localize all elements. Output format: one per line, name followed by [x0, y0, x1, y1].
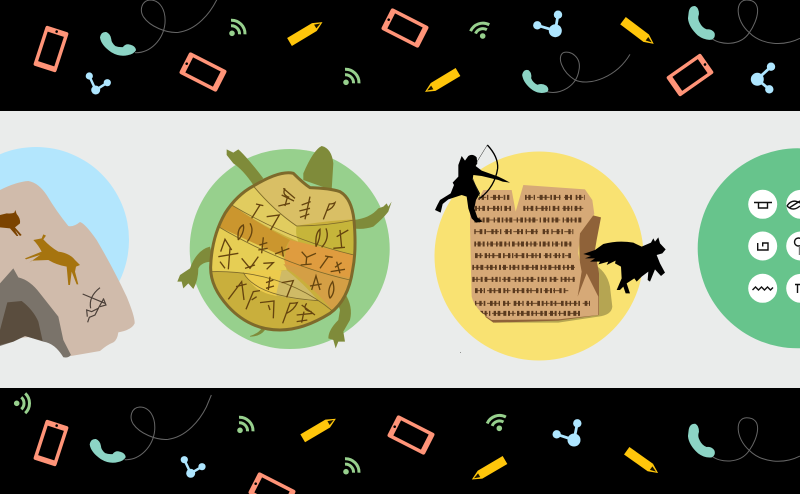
panel: cave paintings — [0, 147, 135, 358]
blue background circle — [0, 147, 129, 333]
tablet dark edge — [485, 215, 601, 323]
bottom black band — [0, 388, 800, 494]
icon: mobile phone — [33, 419, 69, 467]
symbol badge: cross — [786, 274, 800, 303]
shell divider lines — [212, 186, 354, 312]
icon: pencil — [300, 415, 338, 442]
panel: pictographic symbols — [698, 148, 800, 348]
cuneiform inscription rows — [472, 197, 590, 313]
icon: share network — [86, 72, 111, 94]
shell outline — [211, 173, 355, 330]
icon: share network — [533, 10, 562, 37]
icon: pencil — [620, 17, 657, 48]
green background circle — [190, 149, 390, 349]
green background circle — [698, 148, 800, 348]
icon: telephone handset with cord — [90, 395, 211, 462]
turtle head and limbs — [177, 146, 392, 348]
symbol badge: spiral — [748, 232, 777, 260]
yellow background circle — [434, 152, 644, 360]
icon: share network — [181, 456, 206, 478]
shell segments — [212, 174, 354, 328]
icon: pencil — [469, 456, 507, 484]
symbol badge: table — [748, 190, 777, 219]
top black band — [0, 0, 800, 111]
icon: mobile phone — [33, 25, 69, 73]
painting: bison — [0, 210, 22, 236]
icon: share network — [552, 419, 582, 446]
icon: wifi — [229, 20, 245, 36]
icon: mobile phone — [666, 53, 714, 97]
silhouette: winged griffin — [583, 237, 666, 293]
icon: telephone handset with cord — [523, 52, 630, 93]
panel: cuneiform tablet — [434, 145, 666, 360]
icon: pencil — [423, 68, 460, 96]
icon: wifi — [343, 69, 359, 85]
icon: pencil — [624, 447, 661, 477]
oracle bone glyphs — [218, 188, 348, 323]
tablet face — [470, 185, 598, 320]
tablet shadow — [488, 263, 612, 323]
icon: mobile phone — [387, 415, 435, 455]
panel: inscribed turtle shell — [177, 146, 392, 349]
symbol badge: eye — [786, 190, 800, 219]
middle grey band — [0, 111, 800, 388]
small speck — [460, 352, 461, 353]
icon: wifi — [13, 392, 35, 414]
symbol badge: keyhole — [786, 232, 800, 260]
icon: wifi — [343, 459, 359, 474]
silhouette: archer — [435, 145, 510, 223]
icon: share network — [751, 62, 775, 94]
painting: stick archer — [83, 288, 106, 322]
icon: mobile phone — [248, 472, 296, 494]
icon: wifi — [237, 417, 253, 433]
rock with cave — [0, 181, 135, 358]
icon: wifi — [470, 19, 491, 40]
icon: wifi — [486, 411, 508, 432]
icon: mobile phone — [179, 52, 227, 92]
icon: telephone handset with cord — [689, 418, 800, 461]
icon: telephone handset with cord — [101, 0, 222, 55]
icon: pencil — [287, 18, 325, 46]
icon: mobile phone — [381, 8, 429, 48]
icon: telephone handset with cord — [689, 0, 800, 43]
symbol badge: water wave — [748, 274, 777, 303]
painting: deer — [25, 234, 80, 285]
